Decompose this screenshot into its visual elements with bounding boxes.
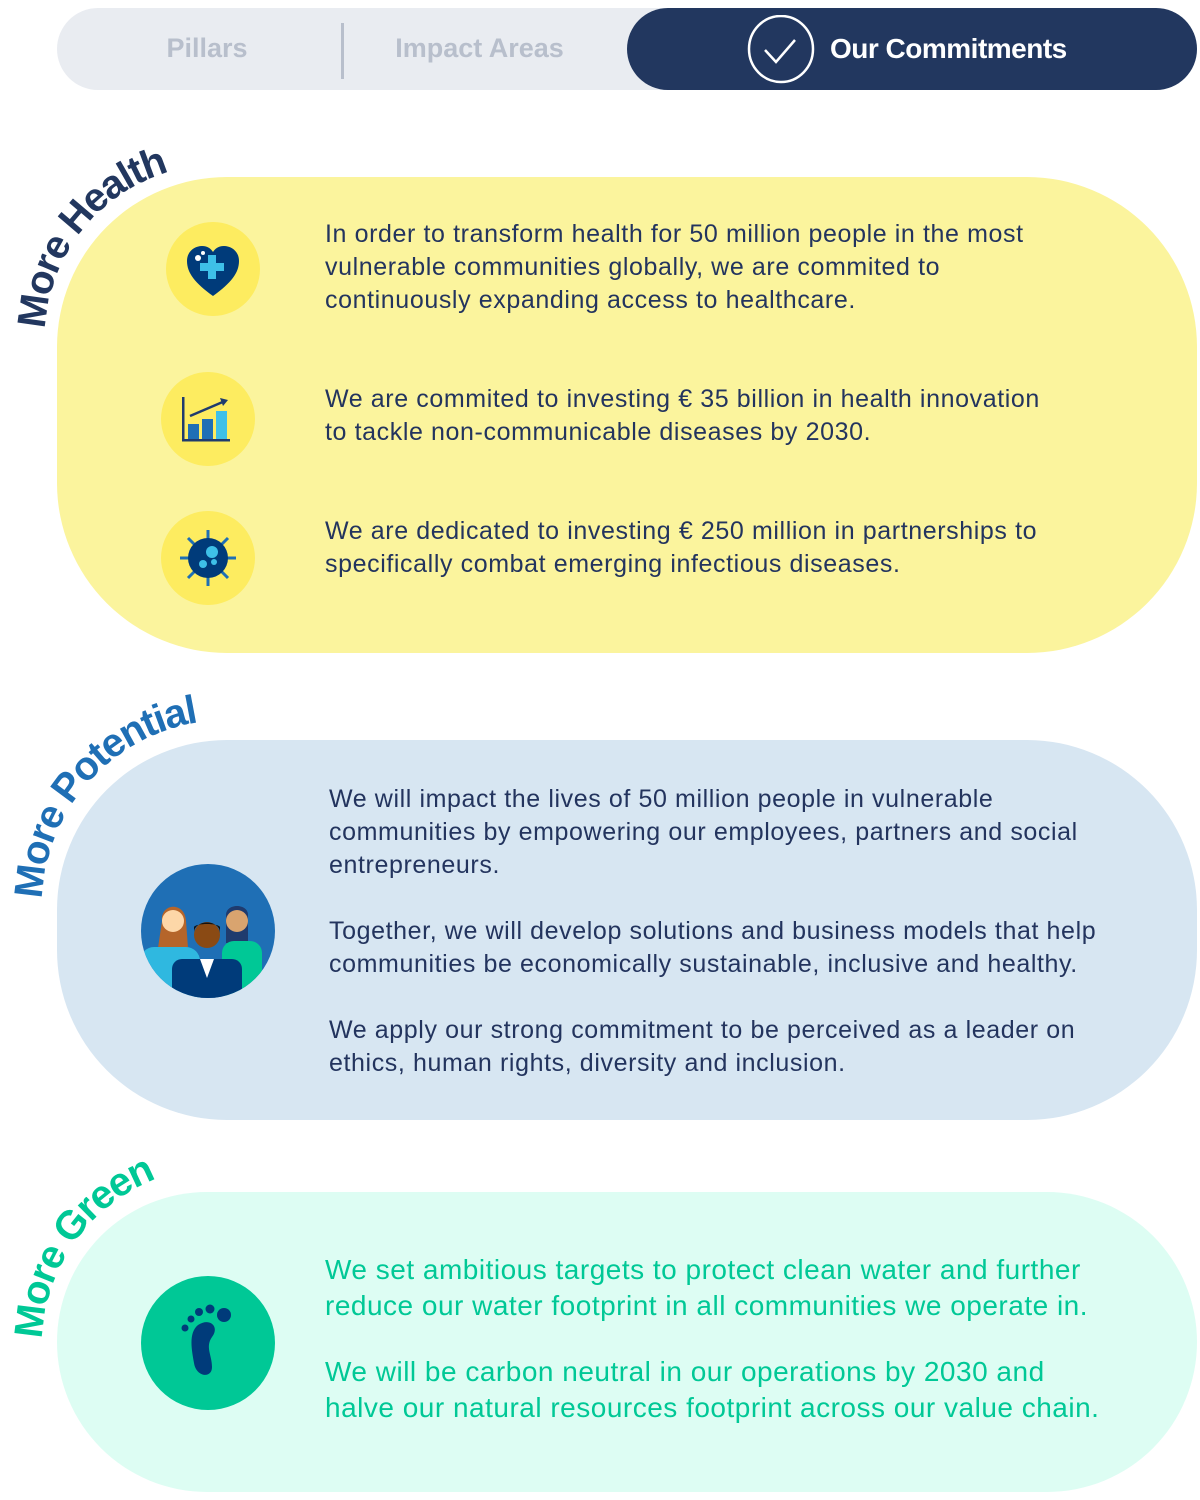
heading: More Potential: More Potential	[14, 694, 196, 896]
text: green	[325, 1254, 1099, 1423]
panel: more green	[57, 1192, 1197, 1492]
text: health 3: We are dedicated to investing € 250 million in partnerships to	[325, 517, 1037, 545]
tab bar	[57, 8, 1197, 90]
text: health 2: We are commited to investing € 35 billion in health innovation	[325, 385, 1040, 413]
text: potential	[329, 785, 1096, 1077]
icon: footprint	[141, 1276, 275, 1410]
heading: More Health: More Health	[18, 150, 167, 326]
icon: virus	[161, 511, 255, 605]
text: health 1: In order to transform health for 50 million people in the most	[325, 220, 1024, 248]
icon: check circle	[748, 15, 814, 84]
tab: pillars: Pillars	[166, 33, 248, 63]
tab: impact areas: Impact Areas	[395, 33, 564, 63]
text: potential: communities by empowering our employees, partners and social	[329, 818, 1078, 846]
text: health 1: continuously expanding access to healthcare.	[325, 286, 856, 314]
icon: growth chart	[161, 372, 255, 466]
text: potential: entrepreneurs.	[329, 851, 500, 879]
text: health 2: to tackle non-communicable diseases by 2030.	[325, 418, 871, 446]
text: green: We will be carbon neutral in our operations by 2030 and	[325, 1356, 1045, 1387]
icon: heart plus	[166, 222, 260, 316]
panel: more potential	[57, 740, 1197, 1120]
tab: our commitments active	[627, 8, 1197, 90]
icon: people	[141, 864, 275, 998]
text: health 2	[325, 385, 1040, 446]
text: health 3	[325, 517, 1037, 578]
text: health 1	[325, 220, 1024, 314]
text: potential: We will impact the lives of 50 million people in vulnerable	[329, 785, 993, 813]
tab: our commitments active: Our Commitments	[830, 33, 1067, 64]
text: green: halve our natural resources footprint across our value chain.	[325, 1392, 1099, 1423]
text: potential: Together, we will develop solutions and business models that help	[329, 917, 1096, 945]
text: green: We set ambitious targets to protect clean water and further	[325, 1254, 1081, 1285]
panel: more health	[57, 177, 1197, 653]
text: potential: We apply our strong commitment to be perceived as a leader on	[329, 1016, 1075, 1044]
text: health 3: specifically combat emerging infectious diseases.	[325, 550, 900, 578]
text: health 1: vulnerable communities globally, we are commited to	[325, 253, 940, 281]
heading: More Green: More Green	[14, 1162, 154, 1336]
curved headings	[14, 150, 196, 1336]
text: potential: ethics, human rights, diversity and inclusion.	[329, 1049, 846, 1077]
text: green: reduce our water footprint in all communities we operate in.	[325, 1290, 1088, 1321]
text: potential: communities be economically sustainable, inclusive and healthy.	[329, 950, 1078, 978]
